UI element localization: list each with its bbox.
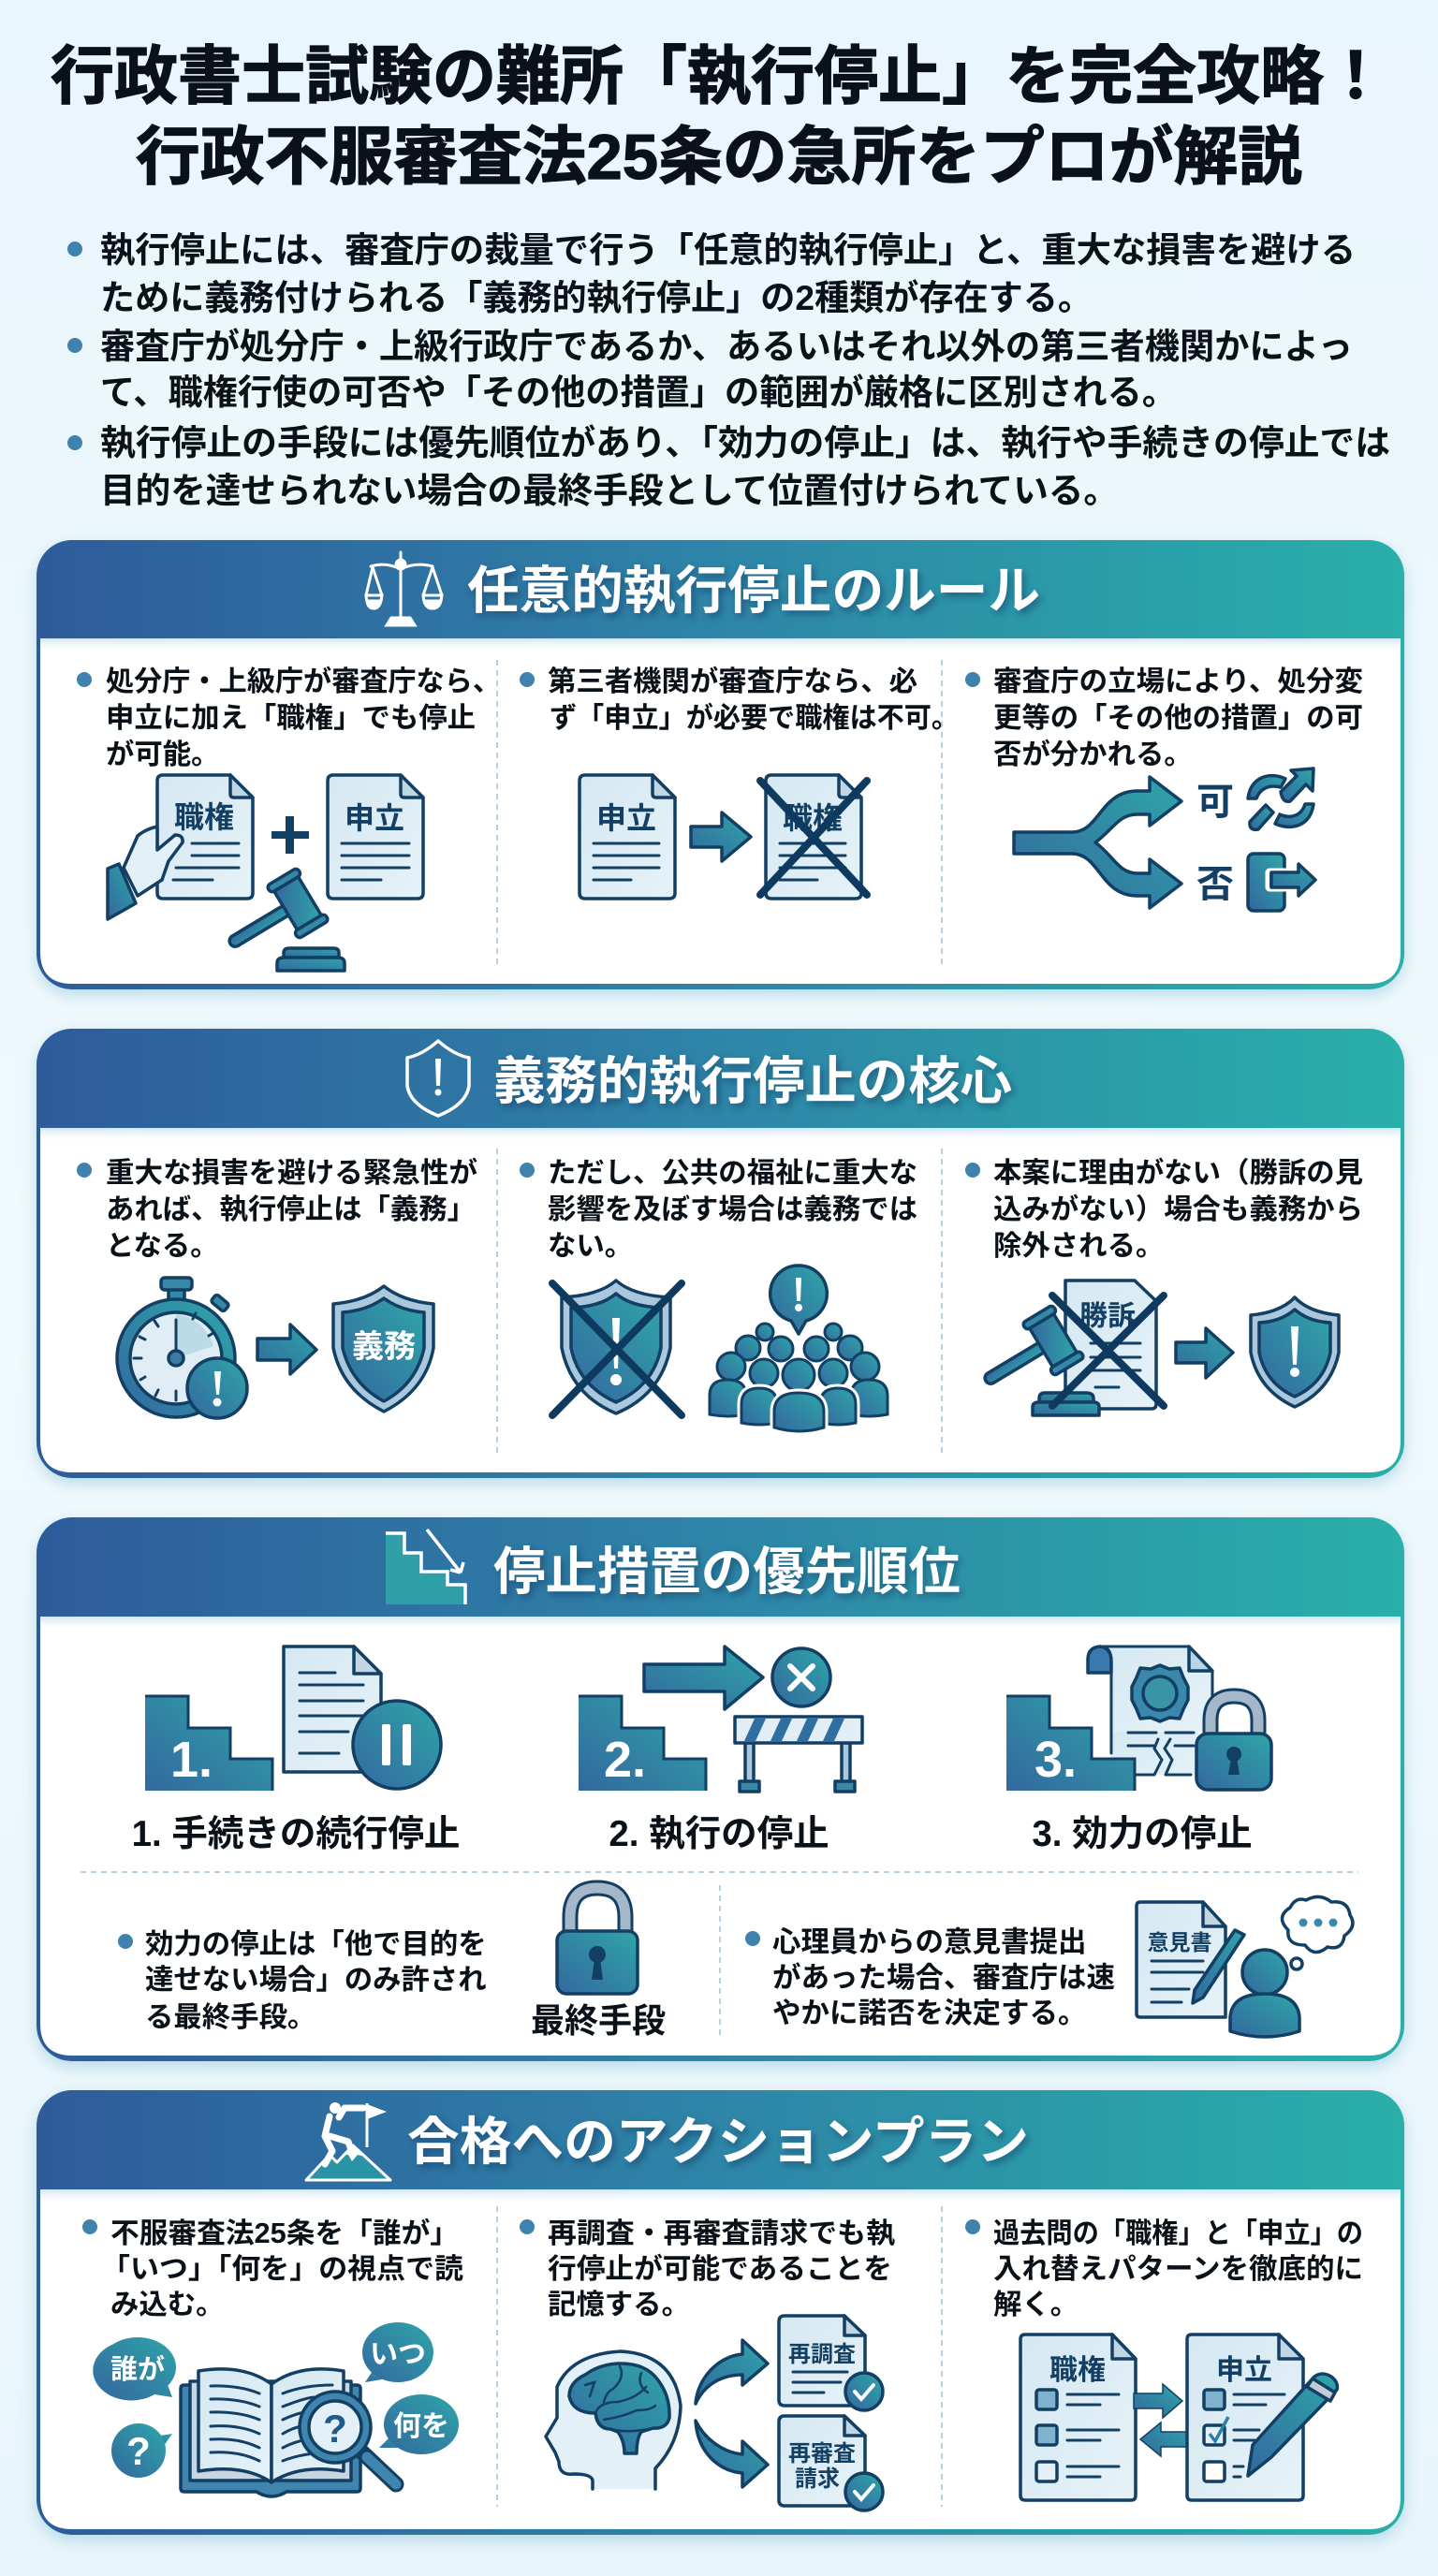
icon: refresh arrows [1248,768,1313,829]
text: 意見書 note: やかに諾否を決定する。 [772,1998,1086,2029]
arrow [257,1325,316,1374]
col 1 text [77,665,501,770]
col 3 text: 審査庁の立場により、処分変 [993,666,1363,697]
col 2 text: ない。 [548,1230,633,1262]
icon: climber on mountain [306,2102,390,2180]
col 2 text: 行停止が可能であることを [548,2252,892,2285]
arrow [691,812,751,861]
bubble: ?: ? [126,2429,151,2473]
col 2 text: 再調査・再審査請求でも執 [548,2217,896,2249]
icon: 職権 checklist: 職権 [1049,2355,1106,2386]
icon: shield alert [1251,1297,1339,1407]
icon: open book with magnifier [181,2369,396,2496]
col 1 text: 申立に加え「職権」でも停止 [106,702,476,734]
icon: 再審査請求 document [779,2416,883,2510]
icon: 再調査 document: 再調査 [788,2342,856,2367]
icon: 意見書 and person: 意見書 [1148,1930,1211,1954]
arrow: up to 再調査 [696,2340,768,2404]
title: 行政不服審査法25条の急所をプロが解説 [136,122,1302,193]
icon: gavel [214,868,345,971]
step 3 label: 3. 効力の停止 [1032,1814,1253,1854]
icon: shield 義務 [333,1286,433,1412]
col 1 text: 「いつ」「何を」の視点で読 [101,2253,463,2285]
col 3 text: 解く。 [993,2289,1078,2320]
step 3: 3. [1034,1732,1077,1788]
plus [271,816,309,854]
col 2 text [520,1157,917,1262]
step 2 [579,1647,862,1792]
icon: 職権 document with hand: 職権 [174,800,234,834]
col 1 text [77,1156,477,1262]
bubble: いつ: いつ [370,2339,426,2370]
col 3 text [965,1156,1363,1262]
icon: stopwatch [117,1278,247,1418]
label: 可: 可 [1196,782,1234,823]
icon: 再調査 document [779,2316,883,2410]
step 2: 2. [604,1732,646,1788]
col 2 text: ただし、公共の福祉に重大な [548,1157,917,1189]
icon: crowd with alert [710,1266,888,1431]
text: 最終手段 note: 効力の停止は「他で目的を [145,1928,487,1960]
col 2 text: 第三者機関が審査庁なら、必 [548,665,917,697]
step 1: 1. [170,1732,213,1788]
heading: 任意的執行停止のルール [467,562,1040,620]
col 2 text: 影響を及ぼす場合は義務では [548,1193,917,1225]
label: 否: 否 [1196,864,1234,905]
icon: lock 最終手段 [557,1888,638,1994]
col 1 text: み込む。 [110,2289,225,2320]
bubble: 誰が: 誰が [110,2353,165,2385]
summary bullets: ために義務付けられる「義務的執行停止」の2種類が存在する。 [100,278,1093,317]
col 1 text: が可能。 [106,738,220,770]
col 3 text: 過去問の「職権」と「申立」の [993,2217,1363,2249]
panel: 義務的執行停止の核心 [37,1029,1404,1478]
bubble: 誰が [93,2337,176,2400]
icon: 再審査請求 document: 再審査 [788,2441,856,2466]
icon: shield crossed out [552,1281,682,1415]
col 3 text: 更等の「その他の措置」の可 [993,702,1363,734]
text: 最終手段 note: る最終手段。 [145,2001,315,2033]
icon: scales [366,552,442,625]
bubble: 何を [379,2394,459,2454]
icon: shield 義務: 義務 [352,1329,416,1365]
panel: 任意的執行停止のルール [37,540,1404,989]
col 1 text: 重大な損害を避ける緊急性が [106,1156,477,1189]
panel: 合格へのアクションプラン [37,2090,1404,2535]
icon: gavel and 勝訴 document crossed out: 勝訴 [1079,1301,1136,1332]
icon: 意見書 and person [1137,1896,1353,2037]
col 2 text: ず「申立」が必要で職権は不可。 [550,701,959,734]
summary bullets: 執行停止には、審査庁の裁量で行う「任意的執行停止」と、重大な損害を避ける [100,230,1356,270]
summary bullets: 執行停止の手段には優先順位があり、「効力の停止」は、執行や手続きの停止では [100,423,1390,462]
col 2 text [520,665,959,734]
summary bullets: 審査庁が処分庁・上級行政庁であるか、あるいはそれ以外の第三者機関かによっ [100,327,1353,366]
col 3 text [965,2217,1363,2320]
col 3 text: 込みがない）場合も義務から [993,1193,1363,1225]
bubble: いつ [362,2322,433,2382]
col 2 text [520,2217,896,2320]
step 2 label: 2. 執行の停止 [609,1814,829,1854]
text: 意見書 note [745,1926,1115,2029]
bubble: ? [111,2423,172,2478]
col 1 text: 処分庁・上級庁が審査庁なら、 [106,665,501,697]
icon: header shield [407,1041,469,1116]
arrow: down to 再審査請求 [696,2421,768,2487]
label: 最終手段: 最終手段 [531,2001,666,2040]
icon: 職権 document with hand [108,775,253,919]
icon: 申立 document 2: 申立 [596,801,656,835]
col 3 text: 入れ替えパターンを徹底的に [993,2253,1363,2285]
title: 行政書士試験の難所「執行停止」を完全攻略！ [51,41,1387,112]
panel: 停止措置の優先順位 [37,1517,1404,2061]
icon: 職権 crossed out [760,775,867,899]
icon: 申立 document 2 [580,775,675,899]
summary bullets: 目的を達せられない場合の最終手段として位置付けられている。 [100,471,1119,510]
text: 意見書 note: があった場合、審査庁は速 [772,1961,1115,1994]
bubble: 何を: 何を [393,2411,449,2442]
icon: fork arrow [1014,777,1181,908]
icon: 職権 checklist [1020,2334,1136,2500]
col 1 text: あれば、執行停止は「義務」 [106,1193,476,1225]
heading: 停止措置の優先順位 [493,1543,961,1601]
icon: 申立 document [328,775,423,899]
arrow [1176,1328,1233,1378]
step 3 [1006,1647,1271,1791]
icon: head with brain [546,2351,681,2489]
title [51,41,1387,193]
step 1 [145,1647,441,1791]
summary bullets: て、職権行使の可否や「その他の措置」の範囲が厳格に区別される。 [100,373,1177,412]
icon: 申立 checklist with pencil [1187,2334,1337,2500]
icon: exit door [1248,854,1315,911]
text: 最終手段 note [118,1928,487,2033]
col 3 text: 除外される。 [993,1230,1164,1262]
col 1 text: となる。 [106,1230,219,1262]
text: 最終手段 note: 達せない場合」のみ許され [145,1964,487,1996]
icon: open book with magnifier: ? [323,2407,347,2451]
icon: 再審査請求 document: 請求 [795,2466,840,2492]
col 3 text [965,666,1363,770]
col 3 text: 否が分かれる。 [993,738,1193,770]
icon: gavel and 勝訴 document crossed out [970,1281,1164,1415]
text: 意見書 note: 心理員からの意見書提出 [772,1926,1086,1958]
icon: header stairs [386,1530,465,1604]
icon: 職権 crossed out: 職権 [783,801,843,835]
col 3 text: 本案に理由がない（勝訴の見 [993,1156,1363,1189]
col 1 text [82,2217,463,2320]
arrow: left [1140,2422,1189,2456]
heading: 義務的執行停止の核心 [493,1052,1012,1110]
col 2 text: 記憶する。 [548,2289,690,2320]
icon: 申立 checklist with pencil: 申立 [1216,2355,1272,2386]
heading: 合格へのアクションプラン [407,2113,1029,2171]
col 1 text: 不服審査法25条を「誰が」 [110,2217,459,2249]
icon: 申立 document: 申立 [345,801,404,835]
step 1 label: 1. 手続きの続行停止 [132,1814,460,1854]
summary bullets [67,230,1390,510]
arrow: right [1134,2384,1182,2418]
